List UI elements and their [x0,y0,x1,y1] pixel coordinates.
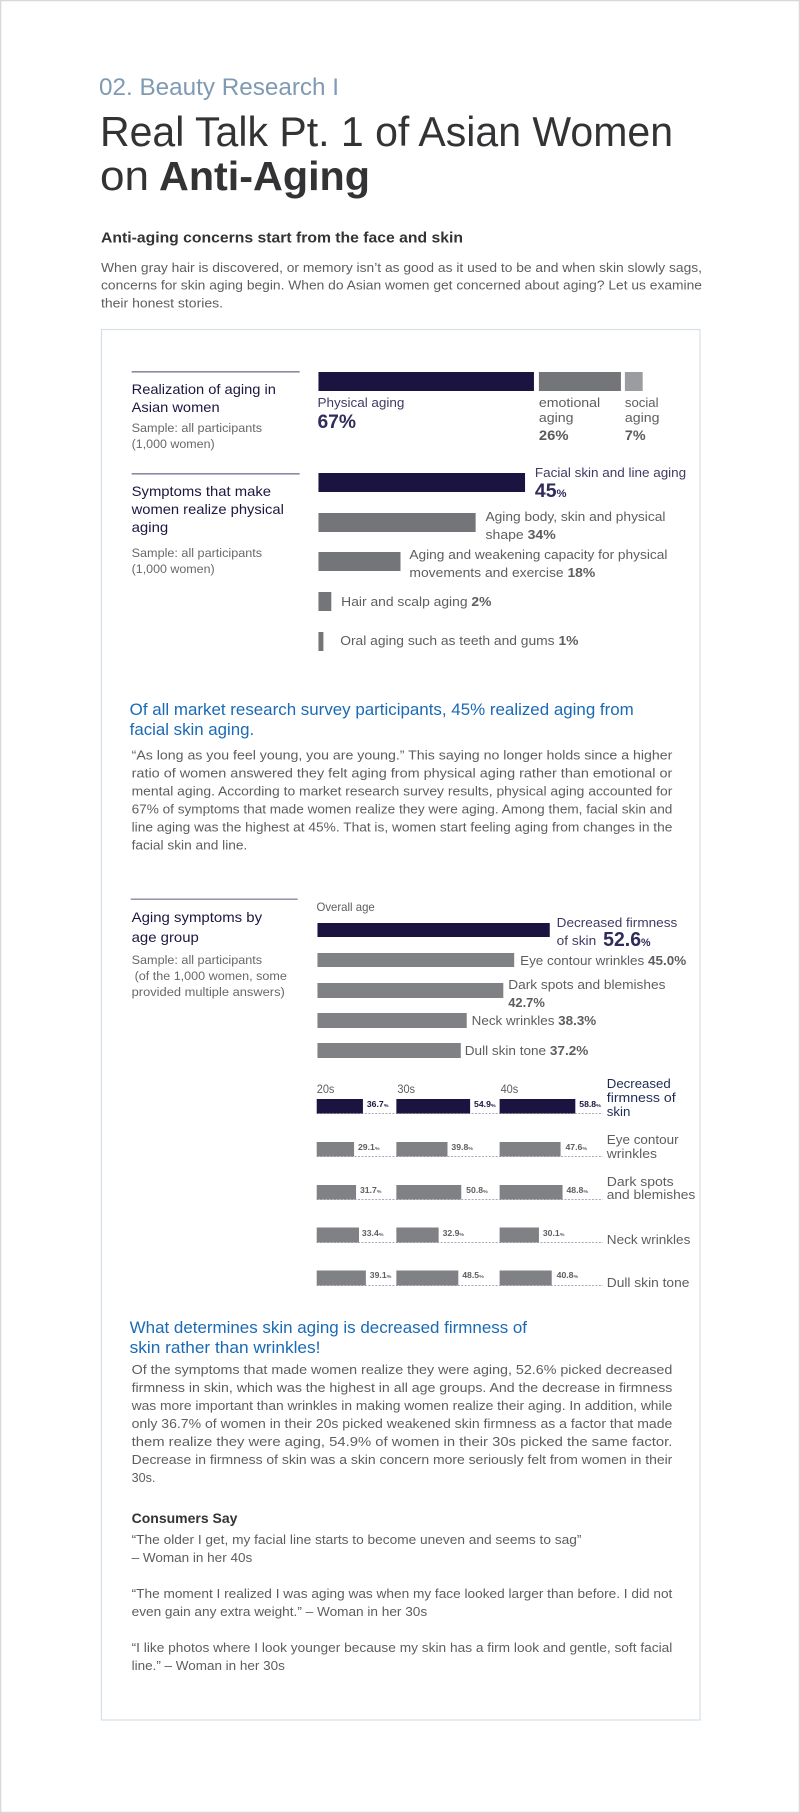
label: physical aging 67%: Physical aging [317,395,404,410]
label: body 34%: shape 34% [486,527,556,542]
bar: social aging [625,372,643,391]
label: eye contour 45.0%: Eye contour wrinkles 45.0% [520,953,687,968]
label: decreased firmness 52.6% [557,915,677,951]
intro text: concerns for skin aging begin. When do Asian women get concerned about aging? Let us examine [101,278,702,292]
subheading: Anti-aging concerns start from the face and skin [101,230,463,246]
callout heading: 45% facial skin: facial skin aging. [130,721,254,739]
sample note [132,546,262,576]
body text: physical aging: ratio of women answered they felt aging from physical aging rather than emotional or [132,765,673,781]
body text: physical aging [132,747,673,853]
sample note: provided multiple answers) [132,985,285,999]
sample note [132,953,287,999]
label: oral 1%: Oral aging such as teeth and gums 1% [340,633,579,648]
row: decreased firmness of skin: 58.8 % [579,1100,602,1109]
label: decreased firmness 52.6%: Decreased firmness [557,915,677,930]
row: neck wrinkles [317,1228,690,1247]
row: dark spots and blemishes [317,1174,695,1202]
chart: age group comparison [317,1076,695,1290]
sample note: Sample: all participants [132,546,262,560]
block heading: Symptoms that make [132,483,271,499]
sample note: (1,000 women) [132,437,215,451]
age headers: 20s [317,1082,334,1096]
block heading: age group [132,929,199,945]
rule [131,898,298,900]
row: decreased firmness of skin: firmness of [607,1090,676,1105]
row: neck wrinkles: Neck wrinkles [607,1232,690,1247]
intro text: their honest stories. [101,296,223,310]
row: dark spots and blemishes: 31.7 % [360,1186,382,1195]
quote: woman in her 30s, photos: line.” – Woman in her 30s [132,1658,285,1673]
label: dark spots 42.7%: 42.7% [508,995,545,1010]
row: dark spots and blemishes: 50.8 % [466,1186,488,1195]
row: decreased firmness of skin: skin [607,1104,630,1119]
label: social aging 7%: social [625,395,659,410]
age headers: 30s [397,1082,415,1096]
sample note: (1,000 women) [132,562,215,576]
bar: eye contour 45.0% [317,953,514,967]
block heading: Asian women [132,399,220,415]
label: facial skin 45%: Facial skin and line aging [535,465,686,480]
body text: physical aging: line aging was the highest at 45%. That is, women start feeling aging from changes in the [132,819,672,835]
row: eye contour wrinkles: 47.6 % [565,1143,588,1152]
block heading [132,909,262,945]
label: overall age: Overall age [316,902,375,914]
bar: emotional aging [539,372,621,391]
title: Real Talk Pt. 1 of Asian Women [100,108,673,155]
label: social aging 7% [625,395,659,443]
heading: consumers say: Consumers Say [132,1510,238,1526]
rule [132,473,300,475]
block heading [132,381,276,415]
title: on [100,152,149,199]
row: eye contour wrinkles: Eye contour [607,1132,679,1147]
row: dark spots and blemishes: Dark spots [607,1174,674,1189]
label: physical aging 67% [317,395,404,433]
bar: dark spots 42.7% [317,983,503,998]
sample note [132,421,262,451]
chart block: symptoms by age group [131,898,687,1058]
bar: hair 2% [318,592,331,611]
bar: oral 1% [318,632,323,651]
chart block: symptoms of physical aging [131,465,686,651]
sample note: Sample: all participants [132,421,262,435]
body text: firmness: Of the symptoms that made women realize they were aging, 52.6% picked decreased [132,1362,672,1377]
sample note: (of the 1,000 women, some [135,969,287,983]
callout heading: firmness rather than wrinkles [130,1319,527,1357]
label: dull skin tone 37.2%: Dull skin tone 37.2% [465,1043,589,1058]
label: physical aging 67%: 67% [317,412,356,433]
quote: woman in her 30s, face larger: even gain any extra weight.” – Woman in her 30s [132,1604,427,1619]
section label: 02. Beauty Research I [99,74,339,101]
label: emotional aging 26%: emotional [539,395,600,410]
row: eye contour wrinkles: wrinkles [606,1146,657,1161]
callout heading: 45% facial skin [130,701,634,739]
quote: woman in her 30s, photos [132,1640,672,1673]
body text: firmness: only 36.7% of women in their 20s picked weakened skin firmness as a factor that made [132,1416,672,1431]
row: decreased firmness of skin [317,1076,676,1119]
intro text [101,260,702,310]
body text: firmness: them realize they were aging, 54.9% of women in their 30s picked the same factor. [132,1434,672,1449]
label: emotional aging 26%: aging [539,410,573,425]
body text: physical aging: mental aging. According to market research survey results, physical aging accounted for [132,783,673,799]
label: emotional aging 26% [539,395,600,443]
block heading: aging [132,519,168,535]
rule [132,371,300,373]
body text: physical aging: “As long as you feel young, you are young.” This saying no longer holds since a higher [132,747,673,763]
age headers [317,1082,518,1096]
label: dark spots 42.7%: Dark spots and blemishes [508,977,665,992]
row: decreased firmness of skin: Decreased [607,1076,671,1091]
row: decreased firmness of skin: 36.7 % [367,1100,389,1109]
row: dull skin tone: 39.1 % [370,1271,392,1280]
bar: capacity 18% [318,552,401,571]
body text: physical aging: 67% of symptoms that made women realize they were aging. Among them, facial skin and [132,801,672,817]
bar: neck wrinkles 38.3% [317,1013,467,1028]
label: capacity 18%: movements and exercise 18% [409,565,596,580]
body text: firmness: 30s. [132,1470,155,1485]
label: social aging 7%: 7% [625,427,646,443]
sample note: Sample: all participants [132,953,262,967]
label: neck wrinkles 38.3%: Neck wrinkles 38.3% [472,1013,597,1028]
quote: woman in her 30s, photos: “I like photos where I look younger because my skin has a firm look and gentle, soft facial [132,1640,672,1655]
label: capacity 18% [409,547,667,580]
label: dark spots 42.7% [508,977,665,1010]
row: neck wrinkles: 32.9 % [443,1229,465,1238]
label: hair 2%: Hair and scalp aging 2% [341,594,492,609]
label: facial skin 45% [535,465,686,502]
row: decreased firmness of skin: 54.9 % [474,1100,496,1109]
block heading [131,483,284,535]
age headers: 40s [501,1082,518,1096]
row: dull skin tone: 48.5 % [462,1271,485,1280]
row: eye contour wrinkles: 29.1 % [358,1143,380,1152]
callout heading: firmness rather than wrinkles: skin rather than wrinkles! [130,1339,320,1357]
row: dark spots and blemishes: 48.8 % [566,1186,589,1195]
label: decreased firmness 52.6%: of skin [557,933,596,948]
quote: woman in her 30s, face larger: “The moment I realized I was aging was when my face looked larger than before. I did not [132,1586,673,1601]
callout heading: firmness rather than wrinkles: What determines skin aging is decreased firmness of [130,1319,527,1337]
bar: body 34% [318,513,476,532]
row: eye contour wrinkles: 39.8 % [451,1143,474,1152]
label: decreased firmness 52.6%: 52.6% [603,929,651,951]
row: eye contour wrinkles [317,1132,679,1161]
label: body 34%: Aging body, skin and physical [486,509,665,524]
body text: firmness [131,1362,673,1485]
label: capacity 18%: Aging and weakening capacity for physical [409,547,667,562]
block heading: Aging symptoms by [132,909,262,925]
title [100,108,673,199]
row: dull skin tone: Dull skin tone [607,1275,689,1290]
intro text: When gray hair is discovered, or memory isn’t as good as it used to be and when skin slowly sags, [101,260,702,275]
body text: firmness: was more important than wrinkles in making women realize their aging. In addition, while [131,1398,672,1413]
block heading: Realization of aging in [132,381,276,397]
chart block: realization of aging [132,371,659,451]
row: dull skin tone [317,1270,689,1290]
row: dull skin tone: 40.8 % [557,1271,579,1280]
label: social aging 7%: aging [625,410,659,425]
label: body 34% [486,509,665,542]
panel: survey results [101,330,700,1720]
body text: firmness: firmness in skin, which was the highest in all age groups. And the decrease in firmness [132,1380,672,1395]
bar: dull skin tone 37.2% [317,1043,461,1058]
title: Anti-Aging [159,153,370,199]
bar: facial skin 45% [318,473,525,492]
label: facial skin 45%: 45% [535,481,567,502]
label: emotional aging 26%: 26% [539,427,569,443]
quote: woman in her 40s [132,1532,581,1565]
quote: woman in her 30s, face larger [132,1586,673,1619]
body text: physical aging: facial skin and line. [132,837,247,853]
quote: woman in her 40s: “The older I get, my facial line starts to become uneven and seems to sag” [132,1532,581,1547]
bar: decreased firmness 52.6% [317,923,550,937]
row: neck wrinkles: 30.1 % [543,1229,565,1238]
row: neck wrinkles: 33.4 % [362,1229,384,1238]
bar: physical aging [318,372,534,391]
row: dark spots and blemishes: and blemishes [607,1187,695,1202]
callout heading: 45% facial skin: Of all market research survey participants, 45% realized aging from [130,701,634,719]
quote: woman in her 40s: – Woman in her 40s [132,1550,252,1565]
block heading: women realize physical [131,501,284,517]
body text: firmness: Decrease in firmness of skin was a skin concern more seriously felt from women in their [132,1452,673,1467]
